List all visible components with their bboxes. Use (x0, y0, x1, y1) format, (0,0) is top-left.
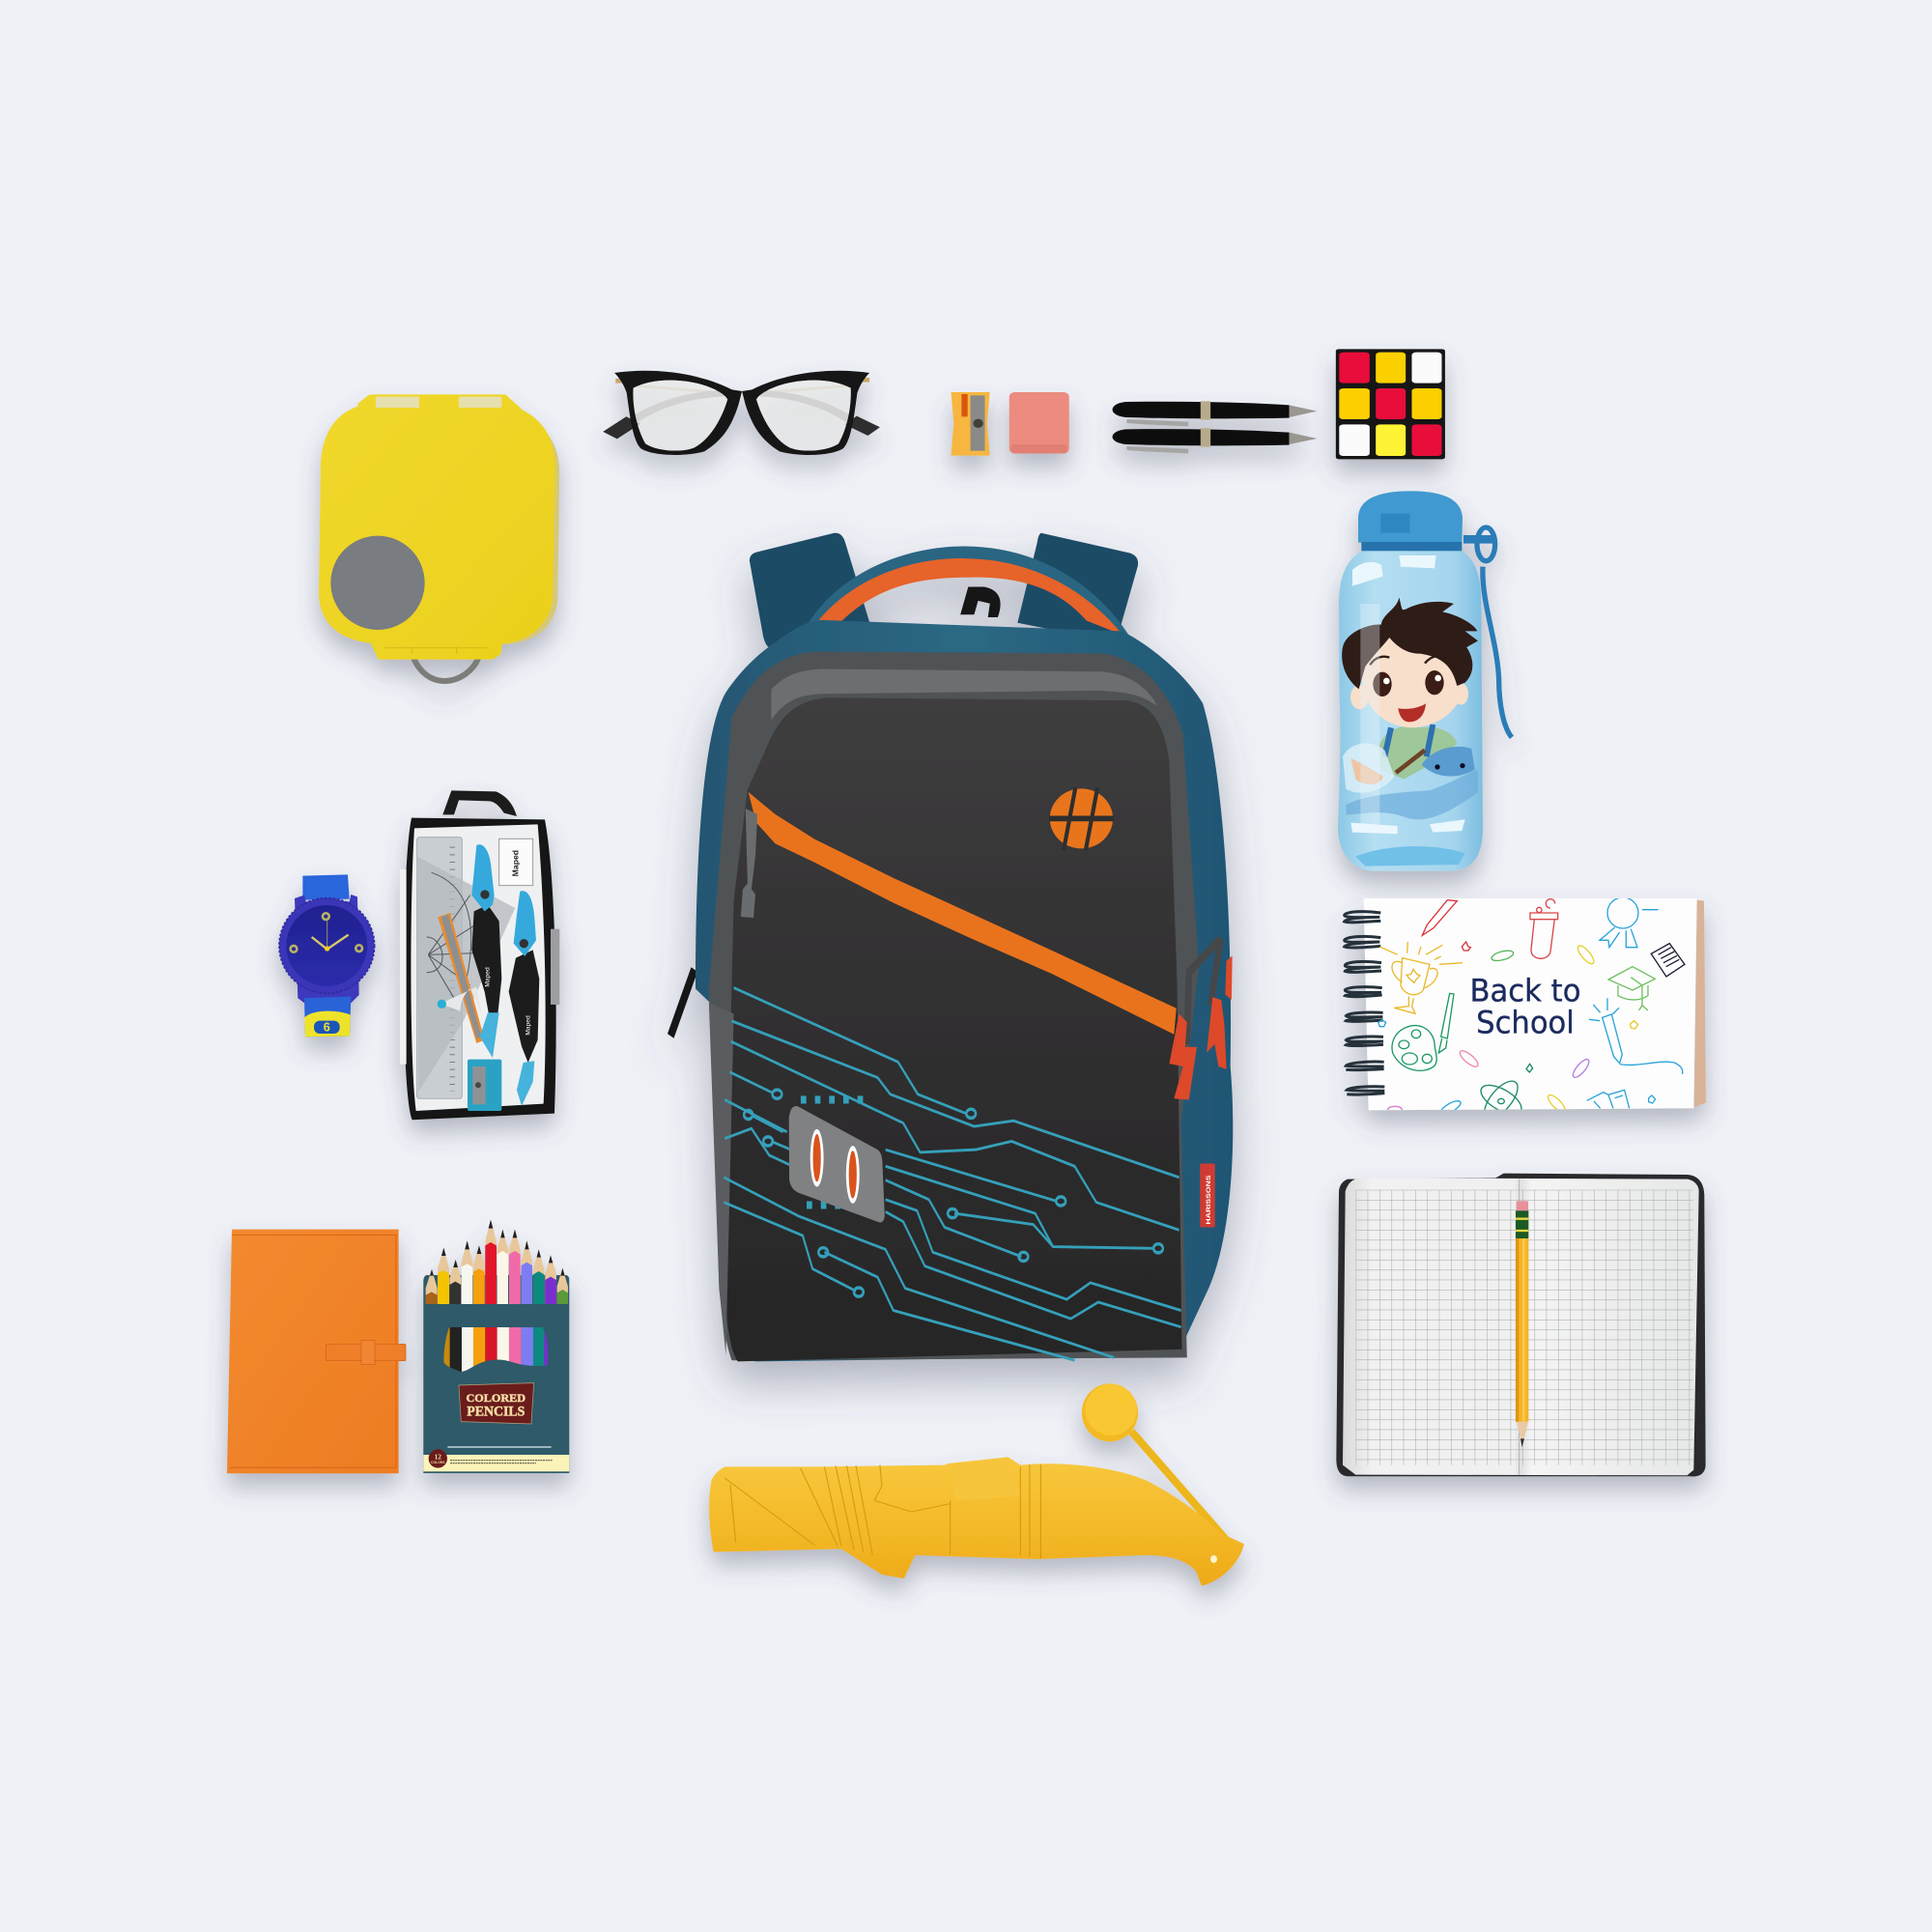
colored pencil box (423, 1220, 569, 1473)
document doodle (1651, 944, 1685, 977)
sharpener strip (961, 394, 968, 416)
sharpener blade (971, 395, 985, 451)
boy head (1362, 628, 1463, 727)
case metal tab (551, 929, 559, 1005)
watch bezel (279, 898, 375, 993)
bottle cap (1358, 491, 1463, 543)
pen two (1113, 428, 1317, 453)
medal doodle (1600, 897, 1659, 948)
lunch box lid (319, 394, 555, 660)
notebook gutter (1519, 1179, 1520, 1475)
box label (459, 1383, 534, 1424)
orange planner (227, 1230, 406, 1473)
sharpener screw (973, 419, 983, 428)
pen one (1113, 401, 1317, 426)
lunch box latch lines (384, 646, 488, 654)
reflective badge (789, 1106, 885, 1222)
umbrella cord (1131, 1432, 1226, 1539)
right lens glass (756, 381, 851, 451)
puzzle cube (1336, 349, 1445, 459)
box rule (447, 1446, 552, 1448)
box front (423, 1304, 569, 1473)
cube colour tiles (1339, 353, 1441, 456)
pencil in set (438, 913, 485, 1043)
sketchbook doodles (1378, 897, 1685, 1123)
front panel (724, 697, 1181, 1361)
bottle neck (1361, 542, 1462, 551)
box label: PENCILS (467, 1404, 525, 1419)
grey mesh frame (709, 652, 1199, 1360)
palette and brush doodle (1392, 993, 1454, 1070)
body outer shell (696, 620, 1233, 1361)
wrist watch (279, 874, 375, 1037)
sketchbook edge (1694, 900, 1706, 1107)
box back flap (423, 1275, 569, 1304)
lunch box rim (493, 415, 559, 644)
box colour count badge (429, 1449, 447, 1468)
ruler ticks (444, 847, 460, 1092)
glasses (610, 371, 874, 455)
eraser (1009, 392, 1069, 453)
watch face (286, 905, 367, 986)
open grid notebook (1336, 1174, 1706, 1476)
umbrella folds (724, 1464, 1040, 1558)
backpack (670, 533, 1233, 1361)
watch bottom strap (304, 997, 351, 1037)
orange zip (749, 792, 1177, 1035)
logo (1049, 787, 1114, 850)
boy shirt (1378, 726, 1457, 780)
sketchbook (1345, 897, 1706, 1123)
bottle base (1355, 846, 1465, 867)
hang loop (960, 586, 1001, 617)
left shoulder strap (750, 533, 869, 648)
lunch box handle (413, 659, 478, 681)
title second line: School (1476, 1004, 1575, 1040)
blue pencil doodle (1589, 998, 1683, 1074)
spiral binding (1345, 912, 1384, 1094)
yellow pencil (1516, 1201, 1528, 1447)
test tube doodle (1530, 899, 1558, 958)
compass two (509, 891, 539, 1106)
bottle water splash (1343, 743, 1478, 819)
maped label (499, 838, 533, 886)
umbrella (709, 1383, 1244, 1586)
right zip pullers (1169, 939, 1233, 1099)
protractor (417, 857, 515, 1092)
lower left grey trim (709, 1003, 734, 1354)
compass one: Maped (485, 967, 492, 987)
bottle highlights (1350, 555, 1465, 834)
compass one (471, 844, 501, 1058)
sharpener body (951, 392, 990, 456)
umbrella handle hole (1210, 1555, 1217, 1563)
watch strap badge: 6 (324, 1021, 330, 1035)
top handle teal (809, 547, 1130, 637)
left zip puller (741, 809, 757, 918)
planner stitching (229, 1235, 396, 1467)
box colour count badge: 12 (435, 1453, 441, 1462)
case side strip (400, 869, 407, 1065)
boy hair (1342, 597, 1478, 689)
ruler (417, 838, 462, 1098)
cartoon boy (1342, 597, 1478, 780)
case frame (404, 818, 556, 1120)
brand tag: HARISSONS (1205, 1175, 1211, 1225)
right lens (742, 371, 869, 455)
lunch box grey seal (330, 536, 425, 630)
watch top strap (302, 874, 350, 900)
water bottle (1338, 491, 1512, 871)
right shoulder strap (1017, 533, 1138, 642)
compass two: Maped (525, 1015, 531, 1036)
case handle (442, 790, 517, 816)
lunch box (319, 394, 559, 681)
temples (610, 380, 874, 436)
boy eyebrows (1370, 656, 1447, 665)
pens (1113, 401, 1317, 453)
notebook cover (1336, 1174, 1706, 1476)
watch hands (312, 921, 349, 952)
atom doodle (1480, 1084, 1522, 1110)
planner cover (227, 1230, 399, 1473)
lunch box clear hinge windows (376, 397, 501, 408)
top handle orange mesh (816, 558, 1122, 635)
boy mouth (1398, 703, 1426, 722)
title on sketchbook: Back to (1469, 973, 1580, 1009)
umbrella body (709, 1457, 1244, 1586)
paper clip doodles (1388, 944, 1596, 1117)
trophy doodle (1379, 942, 1463, 1013)
red pencil doodle (1422, 900, 1457, 935)
side pull strap (670, 970, 695, 1036)
planner strap (326, 1340, 406, 1365)
cap tab (1380, 514, 1409, 533)
left lens glass (633, 381, 727, 451)
watch markers (291, 913, 362, 952)
geometry set (400, 790, 559, 1120)
pencils in box (426, 1220, 568, 1304)
umbrella fabric tab (949, 1457, 1022, 1500)
notebook grid (1355, 1190, 1693, 1465)
box colour count badge: COLORS (431, 1461, 445, 1464)
box footer strip (423, 1455, 569, 1471)
box small print (450, 1461, 553, 1463)
pencil sharpener (951, 392, 990, 456)
box window (443, 1327, 549, 1373)
left lens (614, 371, 742, 455)
circuit lines (724, 987, 1181, 1360)
sharpener in set (468, 1060, 501, 1111)
bottle strap (1463, 527, 1512, 737)
star marks (1462, 942, 1470, 951)
graduation cap doodle (1608, 967, 1655, 1010)
maped label: Maped (511, 850, 521, 876)
watch yellow strap band (304, 1011, 351, 1037)
umbrella cap (1082, 1383, 1138, 1441)
watch strap badge (314, 1021, 340, 1035)
divider arc (441, 987, 481, 1012)
case tray (411, 824, 546, 1111)
bottle body (1338, 551, 1483, 871)
box label: COLORED (466, 1391, 526, 1405)
book doodle (1587, 1090, 1630, 1108)
sketchbook page (1364, 898, 1697, 1110)
brand tag (1200, 1163, 1215, 1227)
lighter frame band (771, 668, 1157, 720)
circuit end rings (744, 1090, 1163, 1296)
watch lugs (295, 895, 359, 1003)
notebook pages (1343, 1178, 1699, 1475)
boy eyes (1373, 670, 1444, 696)
